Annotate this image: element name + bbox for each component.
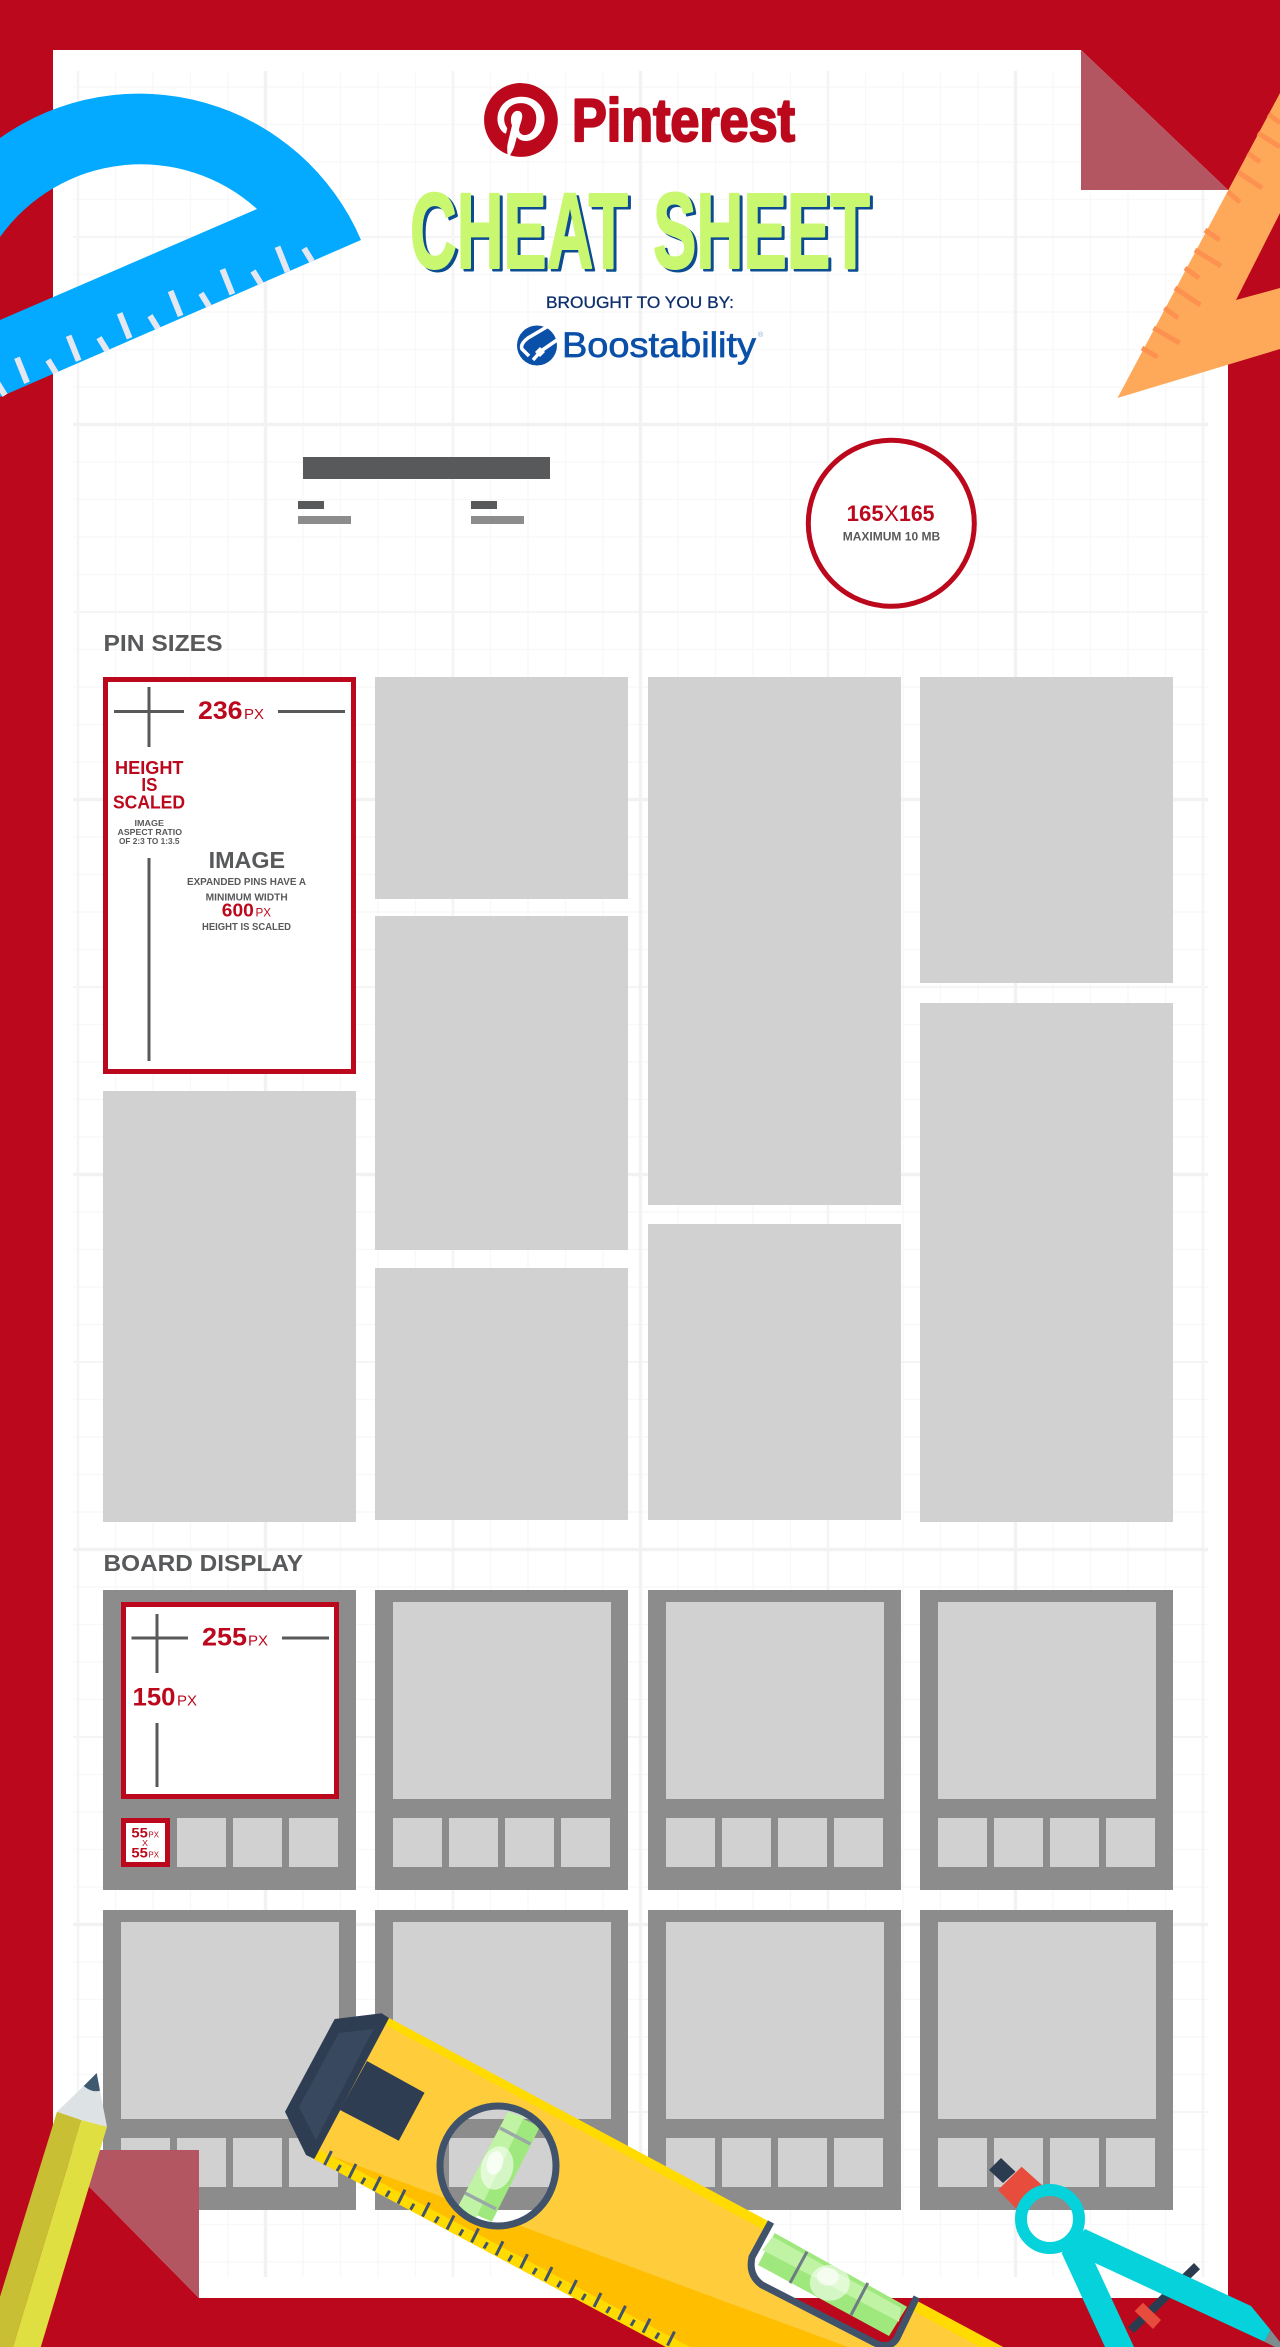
- panel: pin size guide: PX: [256, 906, 271, 920]
- panel: board row 2 column 3: [648, 1910, 901, 2210]
- profile image circle 165x165: 165: [899, 501, 934, 526]
- panel: board row 1 column 2: [375, 1590, 628, 1890]
- panel: pin size guide: MINIMUM WIDTH: [206, 892, 288, 904]
- panel: pin size guide: OF 2:3 TO 1:3.5: [119, 836, 180, 846]
- profile image circle 165x165: [808, 440, 974, 606]
- panel: board row 1 column 4: [920, 1590, 1173, 1890]
- panel: board size guide: 55: [131, 1846, 148, 1861]
- title: Cheat Sheet: SHEET: [653, 170, 870, 291]
- panel: pin size guide: IMAGE: [134, 818, 164, 828]
- panel: board row 2 column 2: [375, 1910, 628, 2210]
- Boostability wordmark: ®: [758, 331, 764, 339]
- panel: pin size guide: IS: [141, 774, 157, 795]
- panel: board size guide: 55: [131, 1826, 148, 1841]
- icon: compass: [989, 2158, 1280, 2347]
- panel: pin size guide: 600: [222, 900, 254, 920]
- icon: Boostability logo mark: [517, 325, 557, 366]
- icon: Pinterest logo mark: [484, 83, 558, 157]
- panel: board row 1 column 3: [648, 1590, 901, 1890]
- panel: board size guide: PX: [148, 1850, 159, 1860]
- panel: pin size guide: HEIGHT IS SCALED: [202, 922, 291, 933]
- top right folded corner: [1081, 50, 1228, 190]
- title: Cheat Sheet: CHEAT: [410, 170, 628, 291]
- panel: pin size guide: SCALED: [113, 792, 185, 813]
- pin placeholders column 1: [103, 1091, 356, 1522]
- panel: board size guide: PX: [148, 1830, 159, 1840]
- panel: board size guide: [103, 1590, 356, 1890]
- panel: pin size guide: [106, 680, 354, 1072]
- panel: board row 2 column 4: [920, 1910, 1173, 2210]
- title: Cheat Sheet: SHEET: [656, 172, 873, 294]
- icon: spirit level: [285, 2013, 1003, 2347]
- panel: pin size guide: IMAGE: [209, 847, 285, 873]
- panel: board size guide: 255: [202, 1624, 247, 1652]
- panel: board size guide: PX: [248, 1633, 268, 1650]
- profile image circle 165x165: MAXIMUM 10 MB: [843, 530, 941, 544]
- icon: pencil: [0, 2073, 107, 2347]
- panel: pin size guide: 236: [198, 697, 242, 725]
- panel: board row 2 column 1: [103, 1910, 356, 2210]
- pin placeholders column 2: [375, 677, 628, 1520]
- panel: board size guide: X: [142, 1838, 148, 1848]
- heading: Board Display: BOARD DISPLAY: [104, 1550, 303, 1576]
- icon: protractor: [0, 94, 361, 397]
- panel: pin size guide: ASPECT RATIO: [118, 827, 182, 837]
- panel: pin size guide: HEIGHT: [115, 757, 184, 778]
- profile stat placeholder left: [298, 501, 351, 524]
- Boostability wordmark: Boostability: [562, 326, 757, 365]
- pin placeholders column 3: [648, 677, 901, 1520]
- profile image circle 165x165: 165: [847, 501, 884, 526]
- profile stat placeholder right: [471, 501, 524, 524]
- pin placeholders column 4: [920, 677, 1173, 1522]
- title: Cheat Sheet: CHEAT: [413, 172, 631, 294]
- heading: Pin Sizes: PIN SIZES: [104, 630, 222, 656]
- Pinterest wordmark: Pinterest: [572, 87, 795, 154]
- panel: board size guide: 150: [132, 1684, 176, 1712]
- bottom left folded corner: [53, 2150, 199, 2298]
- profile name placeholder bar: [303, 457, 550, 479]
- profile image circle 165x165: X: [884, 501, 899, 526]
- panel: board size guide: PX: [177, 1693, 197, 1710]
- icon: orange set square: [1118, 93, 1280, 398]
- panel: pin size guide: PX: [244, 706, 264, 723]
- brought to you by: BROUGHT TO YOU BY:: [546, 293, 734, 312]
- panel: pin size guide: EXPANDED PINS HAVE A: [187, 877, 306, 888]
